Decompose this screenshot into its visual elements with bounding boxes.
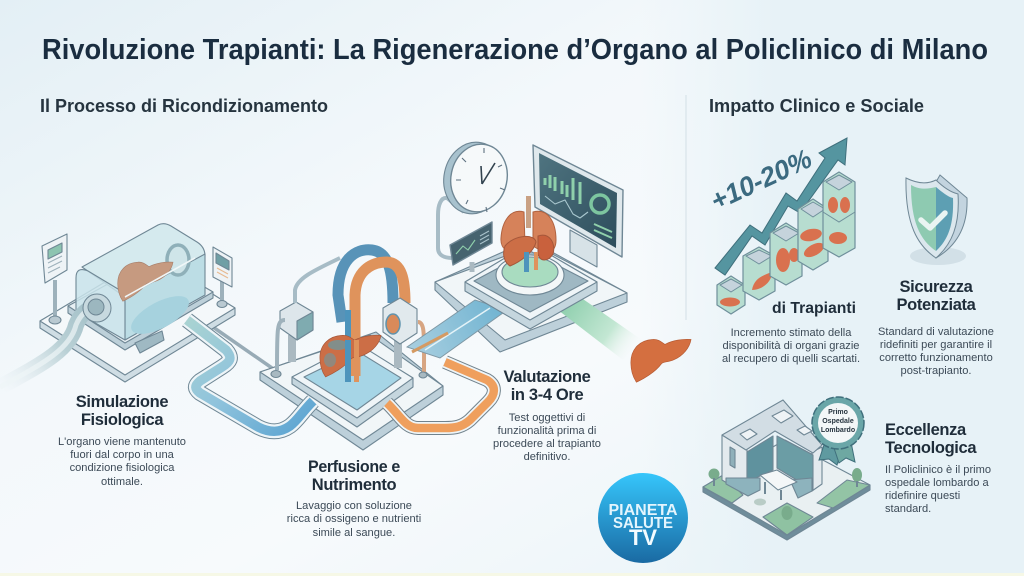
text: di trapianti bbox=[722, 300, 860, 365]
badge: primo ospedale lombardo bbox=[812, 397, 864, 465]
heading: impact: Impatto Clinico e Sociale bbox=[709, 96, 924, 116]
text: sicurezza potenziata: ridefiniti per garantire il bbox=[880, 339, 992, 351]
logo: pianeta salute tv bbox=[598, 473, 688, 563]
sign left bbox=[42, 234, 67, 324]
liver in chamber bbox=[118, 262, 173, 301]
text: sicurezza potenziata: Standard di valutazione bbox=[878, 326, 994, 338]
text: eccellenza tecnologica: Il Policlinico è il primo bbox=[885, 464, 991, 476]
step: perfusione e nutrimento: simile al sangue. bbox=[313, 527, 395, 539]
step: perfusione e nutrimento: Perfusione e bbox=[308, 458, 400, 476]
badge: primo ospedale lombardo: Lombardo bbox=[821, 427, 855, 434]
illustration: restored liver bbox=[631, 339, 691, 382]
step: simulazione fisiologica: fuori dal corpo in una bbox=[70, 449, 175, 461]
chamber platform bbox=[40, 255, 235, 382]
step: simulazione fisiologica: Simulazione bbox=[76, 393, 168, 411]
glass chamber bbox=[76, 224, 205, 342]
step: valutazione: definitivo. bbox=[524, 451, 570, 463]
step: simulazione fisiologica: ottimale. bbox=[101, 476, 143, 488]
text: sicurezza potenziata: post-trapianto. bbox=[901, 365, 971, 377]
step: simulazione fisiologica: condizione fisiologica bbox=[70, 462, 175, 474]
chart: growth jars and arrow bbox=[706, 138, 855, 314]
central pipes bbox=[345, 310, 351, 380]
step: perfusione e nutrimento: Nutrimento bbox=[312, 476, 397, 494]
roof bbox=[722, 400, 822, 453]
illustration: thin connector line bbox=[210, 325, 272, 368]
small monitor bbox=[450, 222, 492, 272]
text: eccellenza tecnologica: ospedale lombardo a bbox=[885, 477, 989, 489]
step: valutazione: Test oggettivi di bbox=[509, 412, 585, 424]
organs bbox=[501, 196, 556, 272]
right pump box bbox=[383, 298, 427, 378]
text: eccellenza tecnologica: standard. bbox=[885, 503, 931, 515]
text: eccellenza tecnologica bbox=[885, 421, 991, 515]
thin line tube bbox=[295, 258, 340, 303]
icon: shield bbox=[906, 175, 967, 265]
text: eccellenza tecnologica: Tecnologica bbox=[885, 439, 977, 457]
title: Rivoluzione Trapianti: La Rigenerazione d’Organo al Policlinico di Milano bbox=[42, 34, 988, 66]
canopy bbox=[760, 470, 797, 490]
step: valutazione bbox=[493, 368, 601, 463]
jars bbox=[717, 172, 855, 314]
logo: pianeta salute tv: SALUTE bbox=[613, 515, 673, 532]
step: simulazione fisiologica bbox=[58, 393, 186, 488]
heading: process: Il Processo di Ricondizionamento bbox=[40, 96, 328, 116]
step: valutazione: procedere al trapianto bbox=[493, 438, 601, 450]
orange arch bbox=[355, 262, 405, 376]
blue tube bbox=[187, 320, 313, 431]
step: perfusione e nutrimento bbox=[287, 458, 421, 539]
glass faces bbox=[747, 436, 773, 482]
text: di trapianti: al recupero di quelli scartati. bbox=[722, 353, 860, 365]
step: valutazione: Valutazione bbox=[504, 368, 591, 386]
badge: primo ospedale lombardo: Ospedale bbox=[822, 418, 854, 425]
right side wall bbox=[812, 447, 822, 491]
inlet tube bbox=[0, 306, 96, 387]
left wall bbox=[722, 435, 747, 495]
text: eccellenza tecnologica: Eccellenza bbox=[885, 421, 967, 439]
illustration: perfusion station bbox=[187, 250, 494, 450]
text: sicurezza potenziata: corretto funzionamento bbox=[879, 352, 993, 364]
sign right bbox=[213, 247, 232, 308]
logo: pianeta salute tv: TV bbox=[629, 525, 657, 550]
text: sicurezza potenziata: Potenziata bbox=[896, 296, 977, 314]
orange tube bbox=[387, 362, 494, 428]
perfused liver bbox=[320, 335, 381, 377]
blue arch bbox=[338, 250, 393, 322]
station platform bbox=[260, 332, 443, 450]
logo: pianeta salute tv: PIANETA bbox=[608, 502, 678, 519]
text: di trapianti: disponibilità di organi grazie bbox=[723, 340, 859, 352]
clock bbox=[437, 137, 513, 258]
text: sicurezza potenziata bbox=[878, 278, 994, 377]
base control panel bbox=[135, 331, 164, 353]
step: simulazione fisiologica: Fisiologica bbox=[81, 411, 164, 429]
arrow bbox=[715, 138, 847, 275]
inner plate bbox=[465, 243, 597, 329]
text: sicurezza potenziata: Sicurezza bbox=[900, 278, 974, 296]
step: valutazione: funzionalità prima di bbox=[498, 425, 596, 437]
left pump box bbox=[271, 302, 313, 378]
step: simulazione fisiologica: L'organo viene mantenuto bbox=[58, 436, 186, 448]
monitor bbox=[533, 145, 623, 267]
text: di trapianti: di Trapianti bbox=[772, 300, 856, 317]
illustration: physiological simulation chamber bbox=[0, 224, 235, 387]
blue channel bbox=[407, 300, 507, 358]
illustration: evaluation station bbox=[407, 137, 642, 360]
step: perfusione e nutrimento: Lavaggio con soluzione bbox=[296, 500, 412, 512]
step: perfusione e nutrimento: ricca di ossigeno e nutrienti bbox=[287, 513, 421, 525]
step: valutazione: in 3-4 Ore bbox=[511, 386, 583, 404]
text: di trapianti: Incremento stimato della bbox=[731, 327, 852, 339]
badge: primo ospedale lombardo: Primo bbox=[828, 409, 848, 416]
stat: +10-20% bbox=[706, 143, 816, 216]
green channel bbox=[558, 297, 642, 360]
evaluation platform bbox=[435, 240, 627, 352]
illustration: hospital bbox=[703, 400, 870, 540]
text: eccellenza tecnologica: ridefinire questi bbox=[885, 490, 960, 502]
